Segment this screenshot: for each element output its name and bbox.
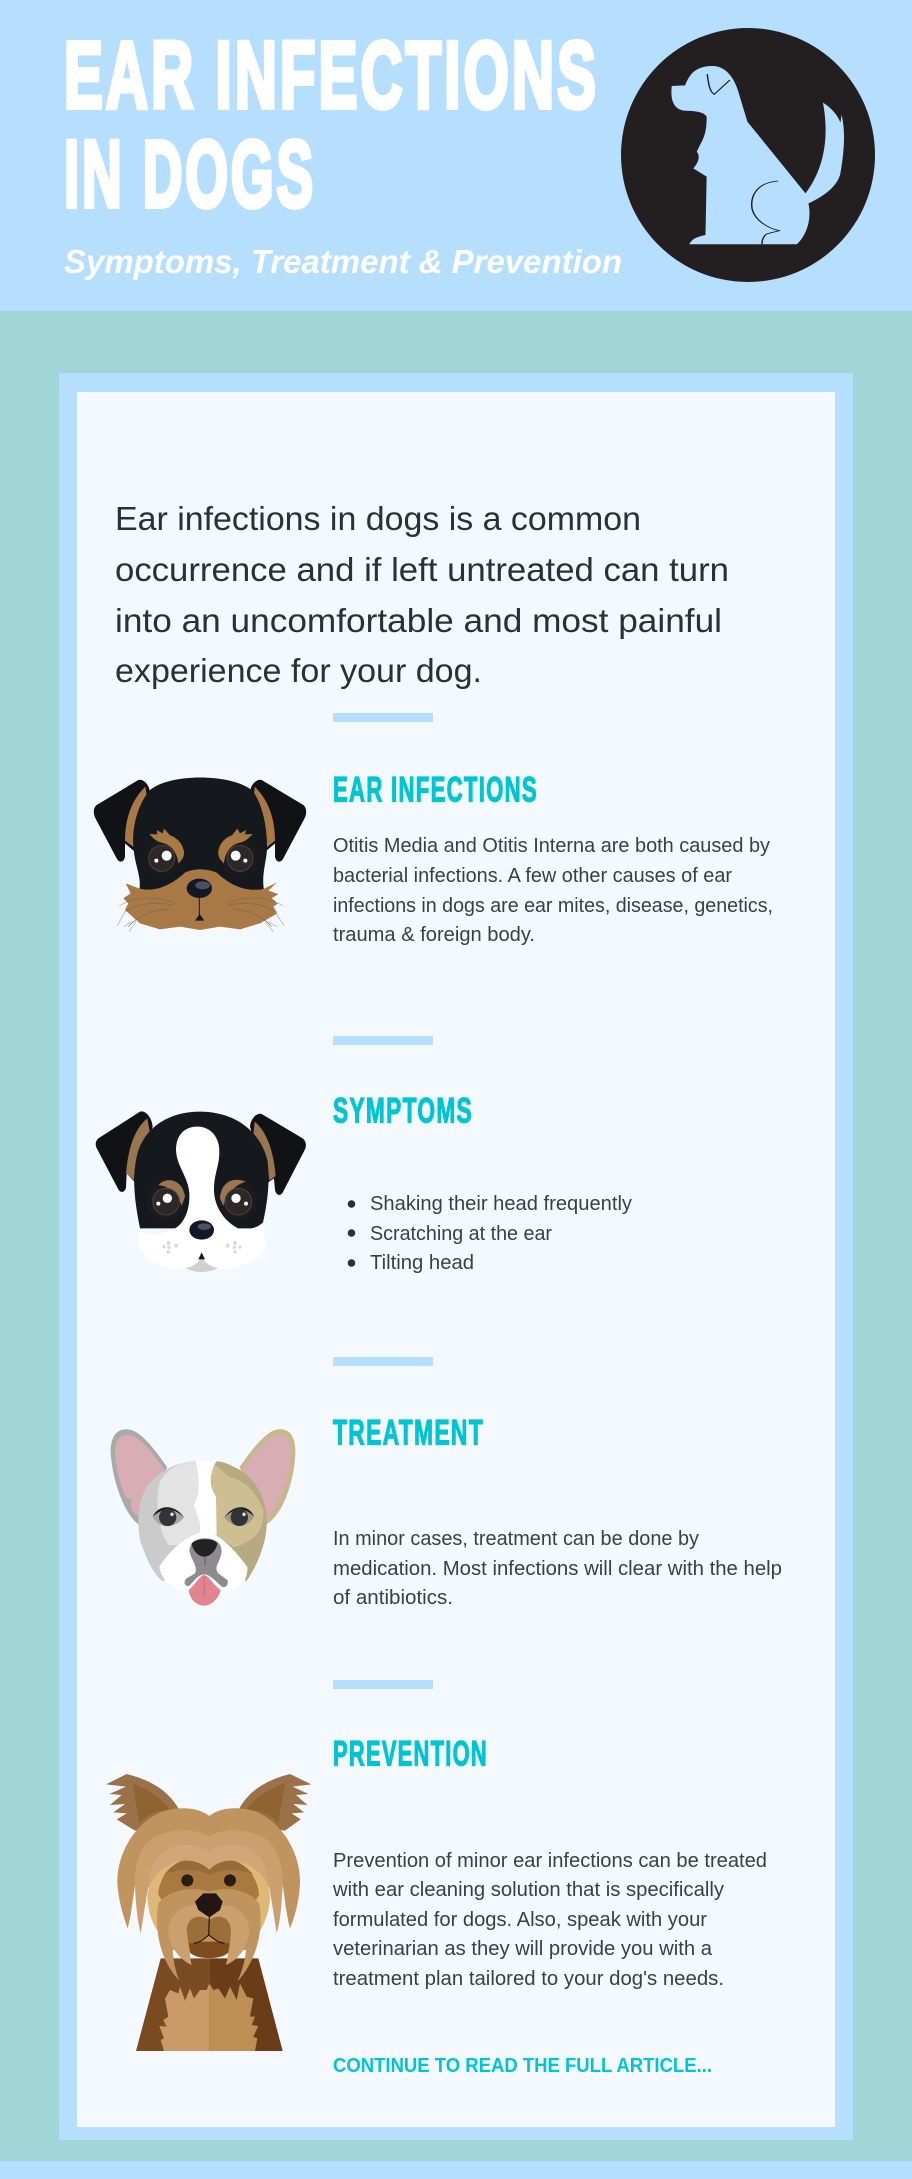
heading: ear infections: EAR INFECTIONS bbox=[333, 770, 538, 810]
text: ear infections: trauma & foreign body. bbox=[333, 924, 535, 946]
intro text: into an uncomfortable and most painful bbox=[115, 602, 722, 639]
divider 1 bbox=[333, 713, 433, 722]
text: prevention: formulated for dogs. Also, speak with your bbox=[333, 1909, 707, 1931]
text: prevention: treatment plan tailored to your dog's needs. bbox=[333, 1968, 724, 1990]
text: prevention: with ear cleaning solution that is specifically bbox=[332, 1879, 724, 1901]
title: IN DOGS bbox=[64, 122, 316, 228]
text: treatment: medication. Most infections will clear with the help bbox=[333, 1558, 782, 1580]
subtitle: Symptoms, Treatment & Prevention bbox=[64, 243, 622, 280]
list: symptoms: Tilting head bbox=[370, 1252, 474, 1274]
list: symptoms bbox=[348, 1193, 632, 1274]
text: treatment: In minor cases, treatment can be done by bbox=[333, 1528, 699, 1550]
icon: french bulldog bbox=[111, 1429, 295, 1606]
title: EAR INFECTIONS bbox=[64, 22, 599, 128]
heading: prevention: PREVENTION bbox=[333, 1734, 488, 1774]
text: prevention bbox=[332, 1850, 767, 1990]
list: symptoms: Shaking their head frequently bbox=[370, 1193, 632, 1215]
icon: dog silhouette badge bbox=[621, 28, 875, 282]
heading: treatment: TREATMENT bbox=[333, 1414, 484, 1452]
icon: black and white puppy bbox=[96, 1111, 306, 1272]
list: symptoms: Scratching at the ear bbox=[370, 1223, 552, 1245]
text: prevention: veterinarian as they will provide you with a bbox=[333, 1938, 713, 1960]
title bbox=[64, 22, 599, 228]
icon: rottweiler puppy bbox=[94, 777, 306, 932]
text: ear infections bbox=[333, 835, 773, 946]
intro text: Ear infections in dogs is a common bbox=[115, 500, 641, 537]
intro text: occurrence and if left untreated can turn bbox=[115, 551, 729, 588]
text: treatment bbox=[333, 1528, 782, 1609]
text: prevention: Prevention of minor ear infections can be treated bbox=[333, 1850, 767, 1872]
text: ear infections: infections in dogs are ear mites, disease, genetics, bbox=[333, 895, 773, 917]
panel: content card bbox=[59, 373, 853, 2140]
intro text bbox=[115, 500, 729, 689]
text: treatment: of antibiotics. bbox=[333, 1587, 453, 1609]
call to action: CONTINUE TO READ THE FULL ARTICLE... bbox=[333, 2054, 712, 2077]
text: ear infections: Otitis Media and Otitis Interna are both caused by bbox=[333, 835, 770, 857]
divider 3 bbox=[333, 1357, 433, 1366]
heading: symptoms: SYMPTOMS bbox=[333, 1092, 473, 1130]
divider 4 bbox=[333, 1680, 433, 1689]
divider 2 bbox=[333, 1036, 433, 1045]
icon: yorkshire terrier bbox=[106, 1774, 311, 2051]
text: ear infections: bacterial infections. A few other causes of ear bbox=[333, 865, 732, 887]
intro text: experience for your dog. bbox=[115, 652, 482, 689]
